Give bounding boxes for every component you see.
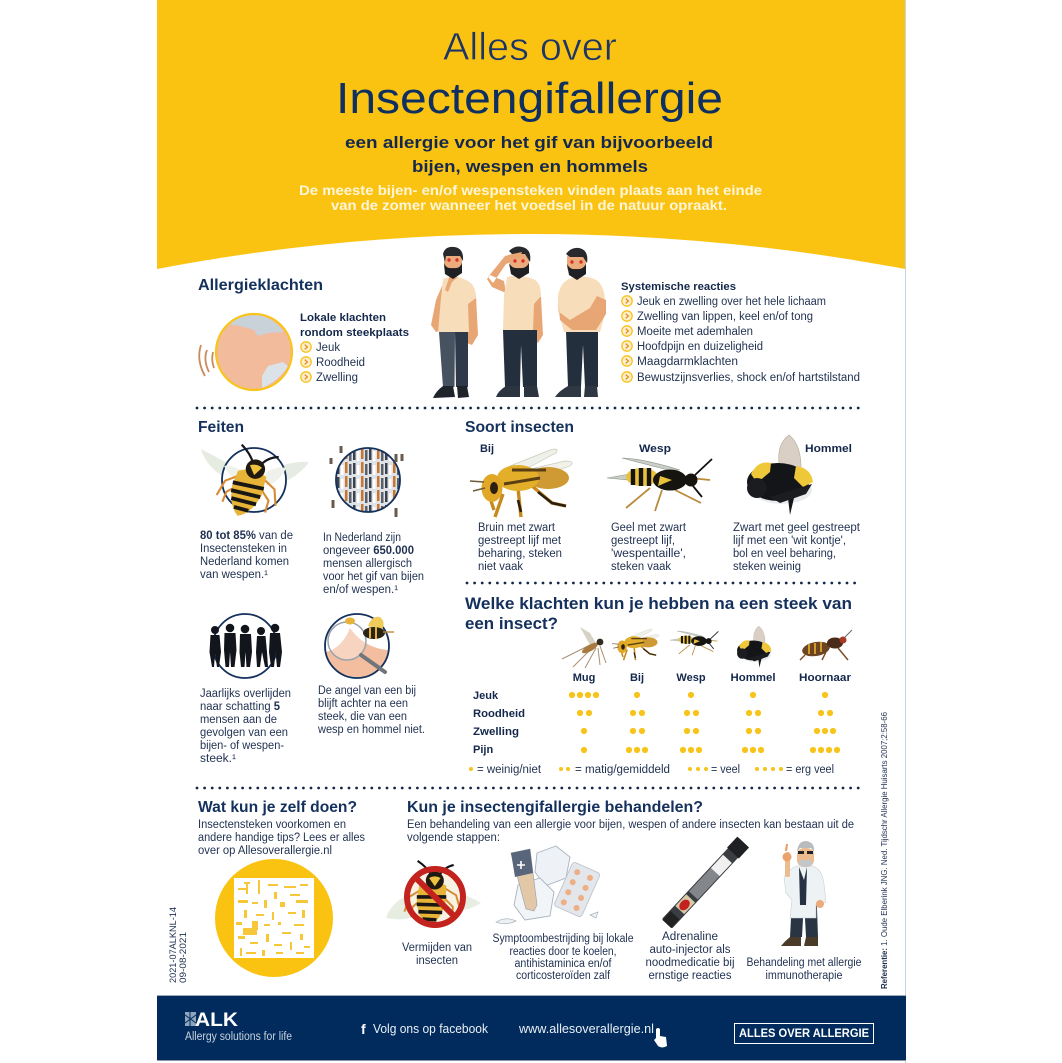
- title: Alles over: [443, 26, 617, 69]
- facebook link: Volg ons op facebook: [373, 1022, 489, 1036]
- row labels: [473, 690, 525, 756]
- text: tips: over op Allesoverallergie.nl: [198, 845, 332, 857]
- fact: 650.000: en/of wespen.¹: [323, 584, 398, 596]
- title: Insectengifallergie: [336, 74, 723, 123]
- row labels: Zwelling: [473, 726, 519, 738]
- facebook link: f: [361, 1021, 366, 1037]
- figure: man with headache: [487, 246, 543, 397]
- step: immunotherapy doctor: [746, 841, 862, 982]
- text: tips: andere handige tips? Lees er alles: [198, 832, 365, 844]
- fact: stinger: De angel van een bij: [318, 685, 416, 697]
- systemic reactions list: Jeuk en zwelling over het hele lichaam: [637, 296, 826, 308]
- legend: = veel: [711, 764, 740, 776]
- heading: Kun je insectengifallergie behandelen: Kun je insectengifallergie behandelen?: [407, 799, 703, 816]
- fact: deaths: steek.¹: [200, 753, 236, 765]
- footer: [157, 995, 906, 1061]
- column labels: Hommel: [730, 672, 776, 684]
- heading: Wat kun je zelf doen: Wat kun je zelf doen?: [198, 799, 357, 816]
- step: symptom relief: reacties door te koelen,: [510, 946, 616, 958]
- local complaints list: [300, 312, 409, 384]
- page background: [157, 0, 906, 1063]
- local complaints list: Roodheid: [316, 357, 365, 369]
- row labels: Roodheid: [473, 708, 525, 720]
- logo: ALK: [185, 1010, 292, 1043]
- insect type: bee: [470, 443, 572, 573]
- insect type: wasp: 'wespentaille',: [611, 548, 686, 560]
- intro text: [299, 183, 763, 213]
- legend: = erg veel: [786, 764, 834, 776]
- insect type: bee: beharing, steken: [478, 548, 562, 560]
- local complaints list: Zwelling: [316, 372, 358, 384]
- insect type: wasp: steken vaak: [611, 561, 671, 573]
- local complaints list: rondom steekplaats: [300, 327, 409, 339]
- systemic reactions list: Maagdarmklachten: [637, 356, 738, 368]
- icon: local sting skin: [199, 314, 292, 390]
- step: avoid insects: [386, 861, 481, 967]
- icon: wasp in circle: [201, 442, 309, 523]
- icon: hornet: [800, 630, 852, 660]
- fact: deaths: bijen- of wespen-: [200, 740, 284, 752]
- fact: 650.000: [323, 532, 424, 596]
- step: immunotherapy doctor: Behandeling met allergie: [746, 957, 862, 969]
- step: avoid insects: insecten: [416, 955, 458, 967]
- column labels: Wesp: [676, 672, 706, 684]
- insect type: bumblebee: Hommel: [805, 443, 852, 455]
- step: symptom relief: antihistaminica en/of: [514, 958, 612, 970]
- document code: 09-08-2021: [178, 932, 189, 983]
- insect type: wasp: gestreept lijf,: [611, 535, 675, 547]
- heading: Allergieklachten: Allergieklachten: [198, 277, 323, 294]
- column labels: Hoornaar: [799, 672, 852, 684]
- text: tips: Insectensteken voorkomen en: [198, 819, 346, 831]
- rating dots: [569, 692, 840, 753]
- document code: [168, 907, 189, 983]
- step: symptom relief: Symptoombestrijding bij lokale: [492, 933, 634, 945]
- systemic reactions list: [621, 281, 860, 384]
- icon: small wasp: [670, 631, 718, 655]
- fact: 650.000: voor het gif van bijen: [323, 571, 424, 583]
- figure: man with stomach ache: [555, 248, 606, 397]
- subtitle: [345, 133, 713, 176]
- reference text: Referentie: 1. Oude Elberink JNG. Ned. Tijdschr Allergie Huisarts 2007;2:58-66: [879, 712, 889, 989]
- fact: 80 tot 85%: [200, 530, 293, 581]
- legend: = weinig/niet: [477, 764, 542, 776]
- insect type: bumblebee: [733, 435, 861, 573]
- column labels: Mug: [573, 672, 595, 684]
- fact: deaths: gevolgen van een: [200, 727, 288, 739]
- icon: crowd in circle: [331, 446, 402, 517]
- insect type: bumblebee: bol en veel beharing,: [733, 548, 836, 560]
- insect type: wasp: [607, 443, 712, 573]
- text: treatment intro: volgende stappen:: [407, 832, 500, 844]
- heading: Welke klachten: Welke klachten kun je hebben na een steek van: [465, 594, 852, 613]
- fact: 650.000: mensen allergisch: [323, 558, 412, 570]
- icon: magnifier with bee sting: [325, 614, 394, 678]
- logo: ALK: ALK: [195, 1010, 238, 1031]
- insect type: bumblebee: lijf met een 'wit kontje',: [733, 535, 846, 547]
- icon: small bumblebee: [737, 626, 771, 668]
- insect type: bee: Bij: [480, 443, 494, 455]
- systemic reactions list: Zwelling van lippen, keel en/of tong: [637, 311, 813, 323]
- legend: = matig/gemiddeld: [575, 764, 670, 776]
- fact: 80 tot 85%: 80 tot 85% van de: [200, 530, 293, 542]
- subtitle: een allergie voor het gif van bijvoorbeeld: [345, 133, 713, 152]
- icon: hand cursor: [654, 1028, 667, 1048]
- text: treatment intro: Een behandeling van een allergie voor bijen, wespen of andere insecten kan bestaan uit de: [407, 819, 854, 831]
- step: immunotherapy doctor: immunotherapie: [766, 970, 842, 982]
- step: adrenaline auto-injector: [646, 837, 749, 982]
- intro text: van de zomer wanneer het voedsel in de natuur opraakt.: [331, 198, 727, 213]
- document code: 2021-07ALKNL-14: [168, 907, 179, 983]
- systemic reactions list: Hoofdpijn en duizeligheid: [637, 341, 763, 353]
- heading: Welke klachten: een insect?: [465, 614, 558, 633]
- row labels: Jeuk: [473, 690, 499, 702]
- title: [336, 26, 723, 123]
- fact: 650.000: ongeveer 650.000: [323, 545, 414, 557]
- logo: ALK: Allergy solutions for life: [185, 1031, 292, 1043]
- fact: deaths: mensen aan de: [200, 714, 277, 726]
- column labels: [573, 672, 852, 684]
- icon: small bee: [612, 629, 659, 660]
- text: tips: [198, 819, 365, 857]
- local complaints list: Lokale klachten: [300, 312, 386, 324]
- systemic reactions list: Moeite met ademhalen: [637, 326, 753, 338]
- heading: Feiten: Feiten: [198, 419, 244, 436]
- fact: 650.000: In Nederland zijn: [323, 532, 401, 544]
- column labels: Bij: [630, 672, 644, 684]
- systemic reactions list: Bewustzijnsverlies, shock en/of hartstilstand: [637, 372, 860, 384]
- QR code: [215, 859, 333, 977]
- step: adrenaline auto-injector: ernstige reacties: [648, 970, 732, 982]
- fact: stinger: [317, 685, 425, 736]
- step: adrenaline auto-injector: Adrenaline: [662, 931, 718, 943]
- icon: mosquito: [562, 627, 606, 668]
- fact: 80 tot 85%: Nederland komen: [200, 556, 289, 568]
- badge: alles over allergie: [734, 1024, 874, 1044]
- badge: alles over allergie: ALLES OVER ALLERGIE: [739, 1028, 869, 1040]
- step: adrenaline auto-injector: auto-injector als: [650, 944, 731, 956]
- fact: deaths: Jaarlijks overlijden: [200, 688, 291, 700]
- insect type: bee: niet vaak: [478, 561, 523, 573]
- insect type: bee: gestreept lijf met: [478, 535, 562, 547]
- insect type: bumblebee: Zwart met geel gestreept: [733, 522, 861, 534]
- text: treatment intro: [407, 819, 854, 844]
- intro text: De meeste bijen- en/of wespensteken vinden plaats aan het einde: [299, 183, 763, 198]
- header band: [157, 0, 905, 269]
- row labels: Pijn: [473, 744, 493, 756]
- fact: 80 tot 85%: van wespen.¹: [200, 569, 268, 581]
- fact: deaths: [200, 688, 291, 765]
- step: symptom relief: corticosteroïden zalf: [516, 970, 611, 982]
- chart: symptom dot table: [473, 672, 852, 756]
- step: symptom relief: [492, 846, 634, 982]
- local complaints list: Jeuk: [316, 342, 340, 354]
- step: adrenaline auto-injector: noodmedicatie bij: [646, 957, 734, 969]
- insect type: bee: Bruin met zwart: [478, 522, 556, 534]
- systemic reactions list: Systemische reacties: [621, 281, 736, 293]
- heading: Soort insecten: Soort insecten: [465, 419, 574, 436]
- figure: man with itchy throat: [431, 247, 478, 398]
- step: avoid insects: Vermijden van: [402, 942, 472, 954]
- fact: stinger: wesp en hommel niet.: [317, 724, 425, 736]
- insect type: wasp: Wesp: [639, 443, 671, 455]
- website link: www.allesoverallergie.nl: [518, 1022, 654, 1036]
- insect type: bumblebee: steken weinig: [733, 561, 801, 573]
- legend: [469, 764, 834, 776]
- icon: silhouettes in circle: [210, 614, 282, 678]
- heading: Welke klachten: [465, 594, 852, 633]
- subtitle: bijen, wespen en hommels: [412, 157, 648, 176]
- fact: deaths: naar schatting 5: [200, 701, 281, 713]
- fact: stinger: steek, die van een: [318, 711, 407, 723]
- insect type: wasp: Geel met zwart: [611, 522, 687, 534]
- fact: stinger: blijft achter na een: [318, 698, 408, 710]
- fact: 80 tot 85%: Insectensteken in: [200, 543, 287, 555]
